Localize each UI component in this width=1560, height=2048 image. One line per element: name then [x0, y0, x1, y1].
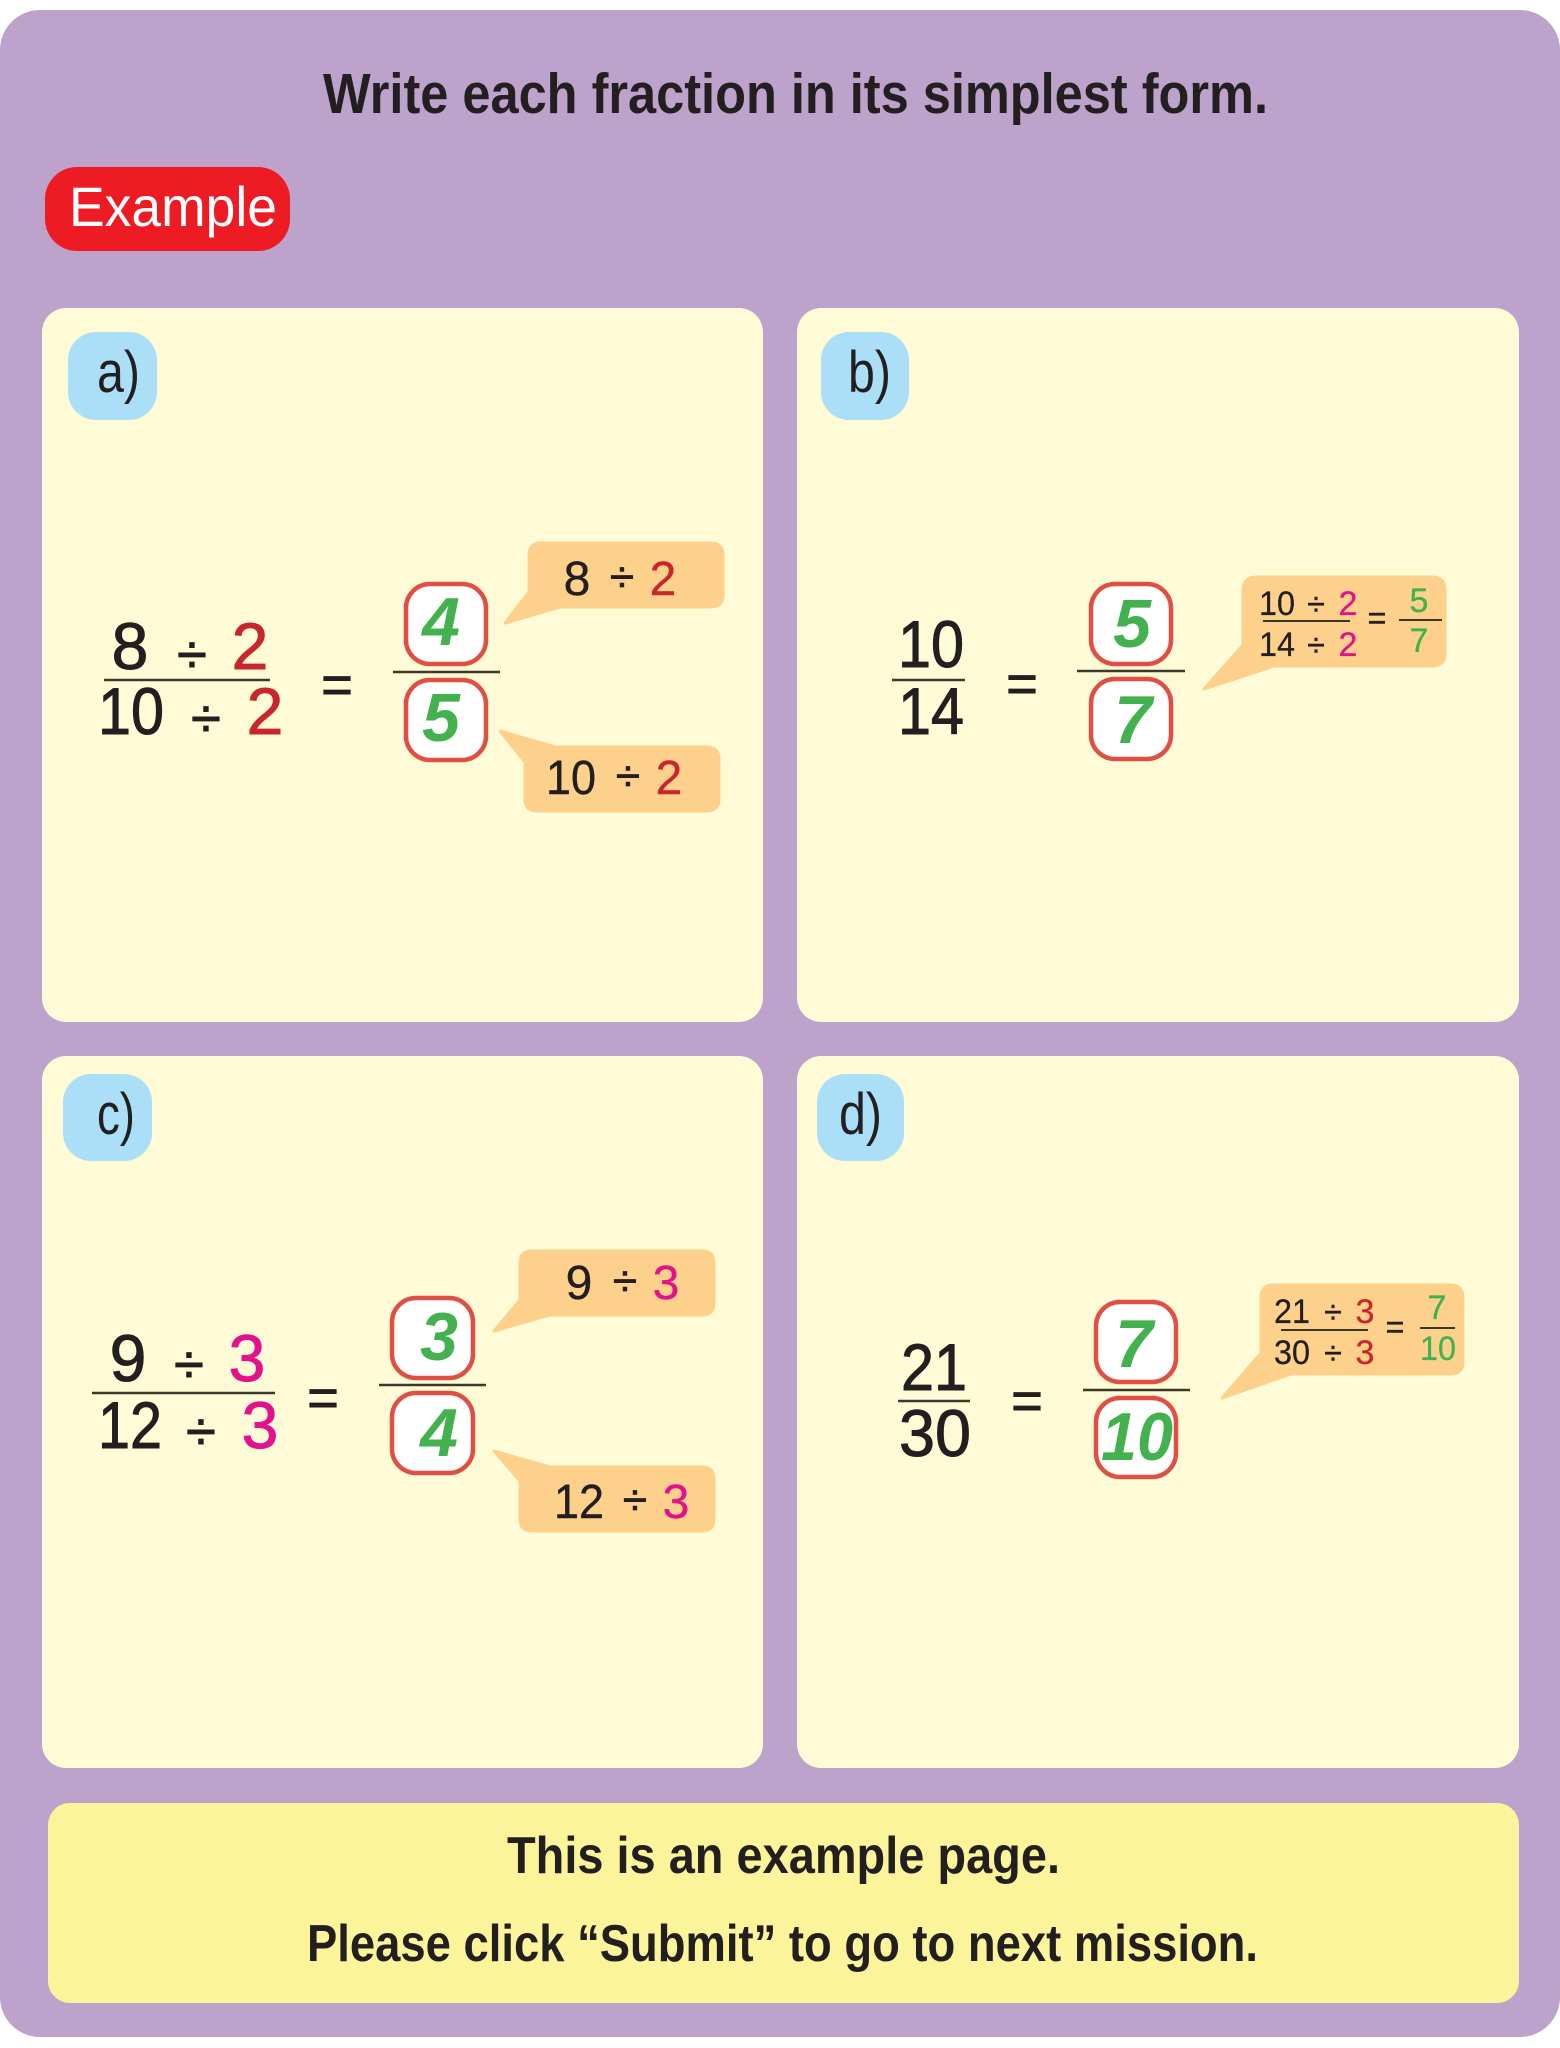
callout 8÷2: 2 [650, 553, 676, 606]
answer fraction 5/7: 5 [1113, 586, 1152, 662]
badge b [821, 332, 909, 420]
panel b [797, 308, 1519, 1022]
badge a [68, 332, 157, 420]
callout working for b: 2 [1339, 585, 1357, 623]
callout working for d: 21 [1274, 1293, 1310, 1331]
callout 10÷2 [500, 731, 719, 811]
equals sign: = [1011, 1371, 1043, 1431]
fraction 9÷3 over 12÷3: 3 [229, 1321, 265, 1395]
fraction 8÷2 over 10÷2: ÷ [191, 689, 221, 749]
callout 8÷2: 8 [564, 553, 590, 606]
fraction 9÷3 over 12÷3: ÷ [186, 1402, 216, 1462]
answer fraction 3/4: 3 [420, 1299, 458, 1375]
callout 9÷3: ÷ [613, 1257, 637, 1306]
callout 12÷3: 12 [554, 1476, 604, 1529]
callout 8÷2: ÷ [610, 553, 634, 602]
fraction 10/14: 14 [898, 674, 964, 748]
callout working for b: ÷ [1307, 586, 1325, 622]
panel a [42, 308, 763, 1022]
equals sign: = [307, 1368, 339, 1428]
badge c [63, 1074, 152, 1161]
footer line 2: Please click “Submit” to go to next mission. [307, 1915, 1258, 1973]
callout working for b: 7 [1410, 622, 1428, 660]
callout working for d: 3 [1356, 1293, 1374, 1331]
callout working for b: 14 [1259, 626, 1295, 664]
footer note [48, 1803, 1519, 2003]
callout 12÷3: ÷ [623, 1476, 647, 1525]
fraction 8÷2 over 10÷2 [98, 609, 283, 749]
answer fraction 7/10 [1083, 1302, 1190, 1477]
fraction 21/30: 21 [901, 1330, 967, 1404]
callout working for d: ÷ [1324, 1294, 1342, 1330]
callout working for b: = [1368, 600, 1386, 636]
callout 12÷3: 3 [663, 1476, 689, 1529]
equals sign: = [1006, 654, 1038, 714]
example label: Example [69, 175, 277, 238]
fraction 9÷3 over 12÷3: 3 [242, 1388, 278, 1462]
badge a: a) [97, 340, 140, 405]
callout working for b [1204, 577, 1445, 689]
callout 12÷3 [494, 1451, 714, 1531]
fraction 8÷2 over 10÷2: 2 [232, 609, 268, 683]
callout 10÷2: ÷ [616, 752, 640, 801]
panel c [42, 1056, 763, 1768]
fraction 8÷2 over 10÷2: 2 [247, 674, 283, 748]
fraction 21/30: 30 [899, 1396, 971, 1470]
callout working for d: 7 [1428, 1289, 1446, 1327]
fraction 8÷2 over 10÷2: ÷ [177, 625, 207, 685]
answer fraction 4/5 [393, 584, 500, 760]
callout 9÷3: 9 [566, 1257, 592, 1310]
callout 10÷2: 2 [656, 752, 682, 805]
fraction 10/14: 10 [898, 607, 964, 681]
equals sign: = [321, 655, 353, 715]
callout working for d: 30 [1274, 1334, 1310, 1372]
answer fraction 5/7 [1077, 584, 1185, 759]
answer fraction 4/5: 5 [422, 680, 461, 756]
badge d [817, 1074, 904, 1161]
fraction 10/14 [892, 607, 965, 748]
fraction 21/30 [898, 1330, 971, 1470]
answer fraction 5/7: 7 [1114, 682, 1155, 758]
title: Write each fraction in its simplest form. [323, 62, 1268, 126]
answer fraction 7/10: 10 [1101, 1399, 1173, 1475]
callout working for d [1222, 1285, 1463, 1398]
callout working for b: 10 [1259, 585, 1295, 623]
fraction 9÷3 over 12÷3: 9 [110, 1321, 146, 1395]
answer fraction 4/5: 4 [420, 584, 460, 660]
panel d [797, 1056, 1519, 1768]
fraction 8÷2 over 10÷2: 8 [112, 609, 148, 683]
callout 9÷3 [494, 1251, 714, 1331]
footer line 1: This is an example page. [507, 1827, 1060, 1885]
fraction 9÷3 over 12÷3 [92, 1321, 278, 1462]
callout 9÷3: 3 [653, 1257, 679, 1310]
callout 8÷2 [505, 543, 723, 623]
fraction 9÷3 over 12÷3: ÷ [174, 1335, 204, 1395]
callout working for b: ÷ [1307, 627, 1325, 663]
callout working for d: 3 [1356, 1334, 1374, 1372]
badge b: b) [848, 340, 891, 405]
fraction 8÷2 over 10÷2: 10 [98, 674, 164, 748]
badge c: c) [97, 1082, 135, 1147]
callout working for d: 10 [1420, 1330, 1456, 1368]
example label [45, 167, 290, 251]
callout working for b: 5 [1410, 582, 1428, 620]
callout working for b: 2 [1339, 626, 1357, 664]
callout working for d: ÷ [1324, 1335, 1342, 1371]
answer fraction 3/4: 4 [418, 1395, 458, 1471]
answer fraction 3/4 [379, 1298, 486, 1473]
badge d: d) [839, 1082, 882, 1147]
answer fraction 7/10: 7 [1115, 1306, 1156, 1382]
callout 10÷2: 10 [546, 752, 596, 805]
fraction 9÷3 over 12÷3: 12 [98, 1388, 162, 1462]
callout working for d: = [1386, 1309, 1404, 1345]
